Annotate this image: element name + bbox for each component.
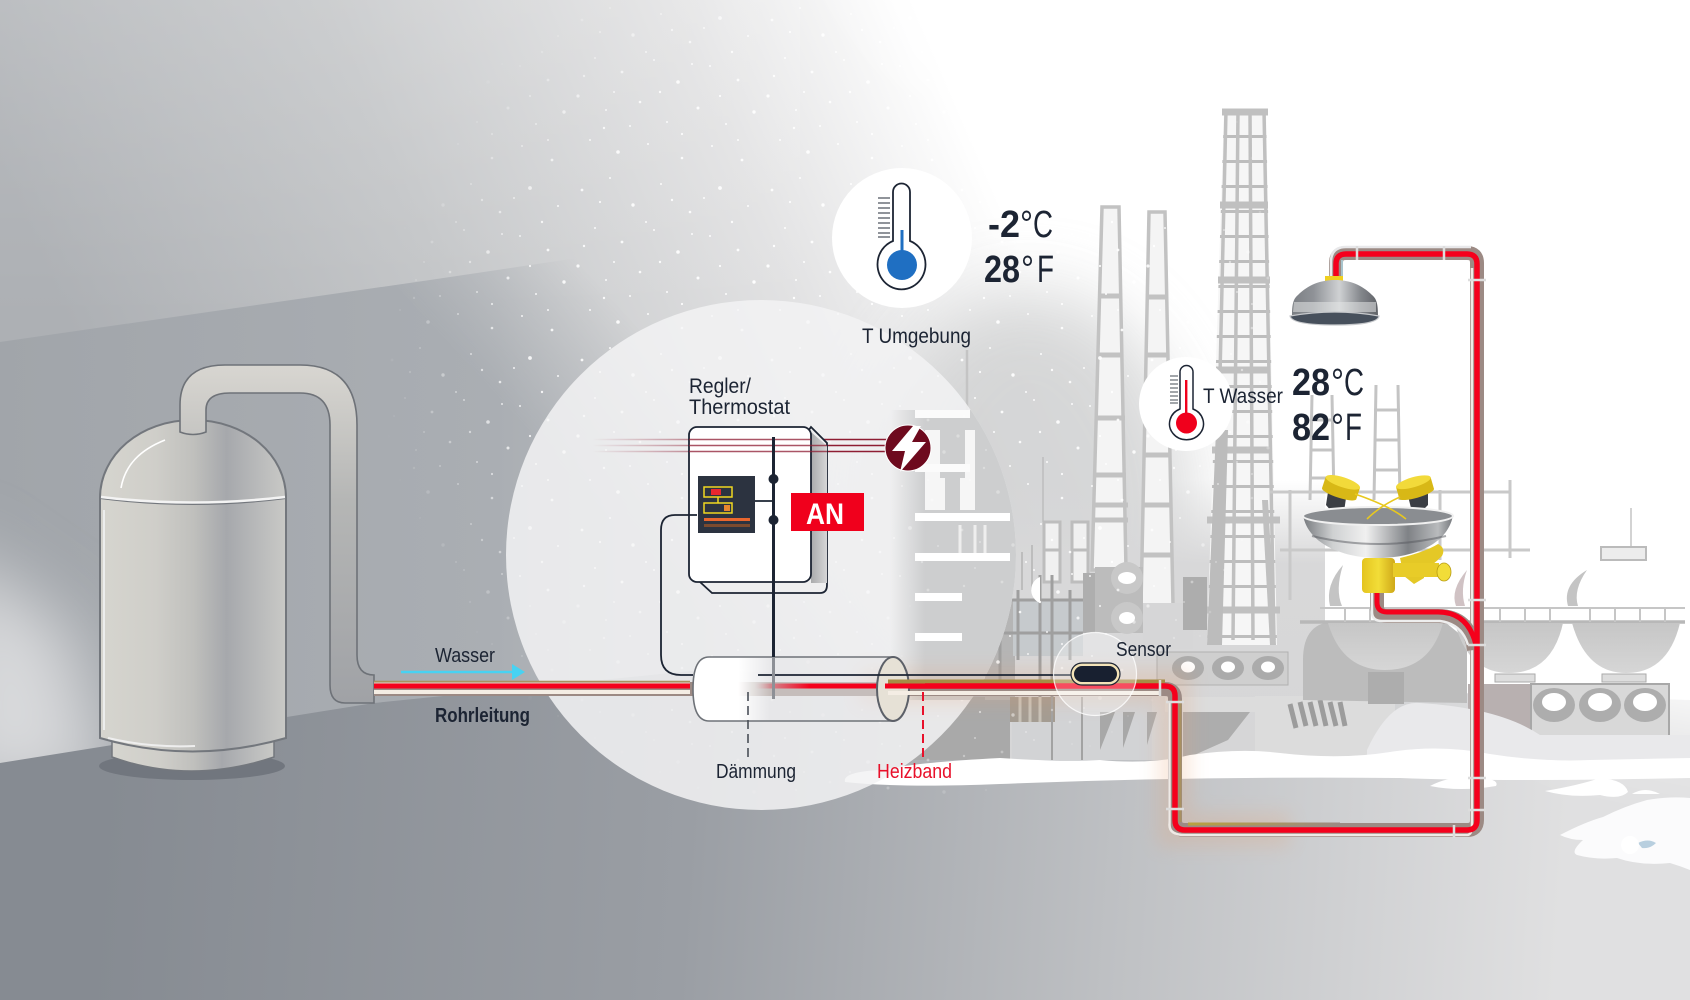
branch to eyewash — [1377, 592, 1474, 650]
compressor ovals — [1531, 684, 1669, 736]
sensor bubble — [1054, 632, 1136, 716]
dome — [100, 420, 286, 504]
label: Wasser: Wasser — [435, 645, 495, 667]
lower plant left — [990, 562, 1207, 760]
valve body — [1362, 558, 1395, 593]
eyewash station — [1303, 472, 1453, 593]
label: Dämmung: Dämmung — [716, 761, 796, 783]
water temperature readout: F — [1345, 407, 1362, 449]
label: T Umgebung: T Umgebung — [862, 325, 971, 348]
red heating tape — [374, 684, 690, 688]
valve bracket — [1400, 544, 1443, 584]
small chimneys left — [1022, 457, 1089, 590]
water temperature readout: ° — [1331, 362, 1344, 404]
ambient temperature readout — [984, 204, 1054, 291]
base — [112, 735, 274, 771]
tall chimneys — [1092, 207, 1173, 605]
water temperature readout — [1292, 362, 1364, 449]
ambient temperature readout: 28 — [984, 249, 1020, 291]
ambient thermometer — [832, 168, 972, 308]
base haze of the plant — [900, 480, 1325, 760]
AN status badge: AN — [806, 498, 844, 531]
red pipe glow — [520, 620, 1477, 830]
factory silhouette in background — [900, 110, 1685, 760]
shadow — [99, 752, 285, 780]
water jets — [1355, 494, 1406, 519]
AN status badge — [791, 493, 864, 531]
label: T Wasser: T Wasser — [1203, 385, 1283, 408]
label: Regler/Thermostat: Regler/ — [689, 375, 751, 398]
platform far right — [1601, 547, 1646, 560]
dashed leader: Heizband — [922, 692, 924, 757]
thin towers — [967, 350, 1631, 600]
icon: power lightning — [885, 425, 931, 472]
arrow: water flow — [401, 664, 525, 680]
body — [100, 498, 286, 752]
control panel — [698, 476, 755, 533]
label: Sensor: Sensor — [1116, 639, 1171, 661]
storage tank with outlet pipe — [99, 365, 374, 780]
emergency shower head — [1290, 276, 1379, 325]
lower plant middle — [1157, 622, 1467, 760]
label: Regler/Thermostat — [689, 375, 790, 419]
ambient temperature readout: ° — [1021, 249, 1034, 291]
building seen through the circle — [890, 410, 1020, 700]
ambient temperature readout: ° — [1020, 204, 1033, 246]
big white detail circle — [506, 300, 1016, 810]
outlet pipe — [180, 365, 374, 703]
yellow right nozzle — [1395, 472, 1435, 513]
main lattice tower — [1207, 110, 1280, 645]
snow on ground — [845, 703, 1690, 797]
sensor wire — [758, 674, 1072, 676]
dashed leader: Dämmung — [747, 692, 749, 757]
water temperature readout: ° — [1331, 407, 1344, 449]
insulation cylinder — [693, 657, 925, 721]
yellow left nozzle — [1321, 472, 1362, 512]
snow mound bottom right — [1560, 797, 1690, 870]
label: Rohrleitung: Rohrleitung — [435, 705, 530, 727]
ambient temperature readout: -2 — [988, 204, 1020, 246]
ambient temperature readout: F — [1037, 249, 1054, 291]
label: Heizband: Heizband — [877, 761, 952, 783]
thermostat box — [661, 427, 827, 699]
wiring — [661, 437, 778, 699]
falling snow — [400, 8, 1270, 794]
ambient temperature readout: C — [1033, 204, 1053, 246]
water temperature readout: 82 — [1292, 407, 1330, 449]
snow dots in circle — [908, 418, 1014, 592]
basin — [1303, 515, 1453, 558]
water temperature readout: C — [1344, 362, 1364, 404]
water temperature readout: 28 — [1292, 362, 1330, 404]
spherical gas tanks — [1300, 565, 1685, 734]
power lines — [592, 440, 890, 452]
main pipe with heating tape — [374, 246, 1486, 838]
label: Regler/Thermostat: Thermostat — [689, 396, 790, 419]
water thermometer — [1139, 357, 1233, 451]
